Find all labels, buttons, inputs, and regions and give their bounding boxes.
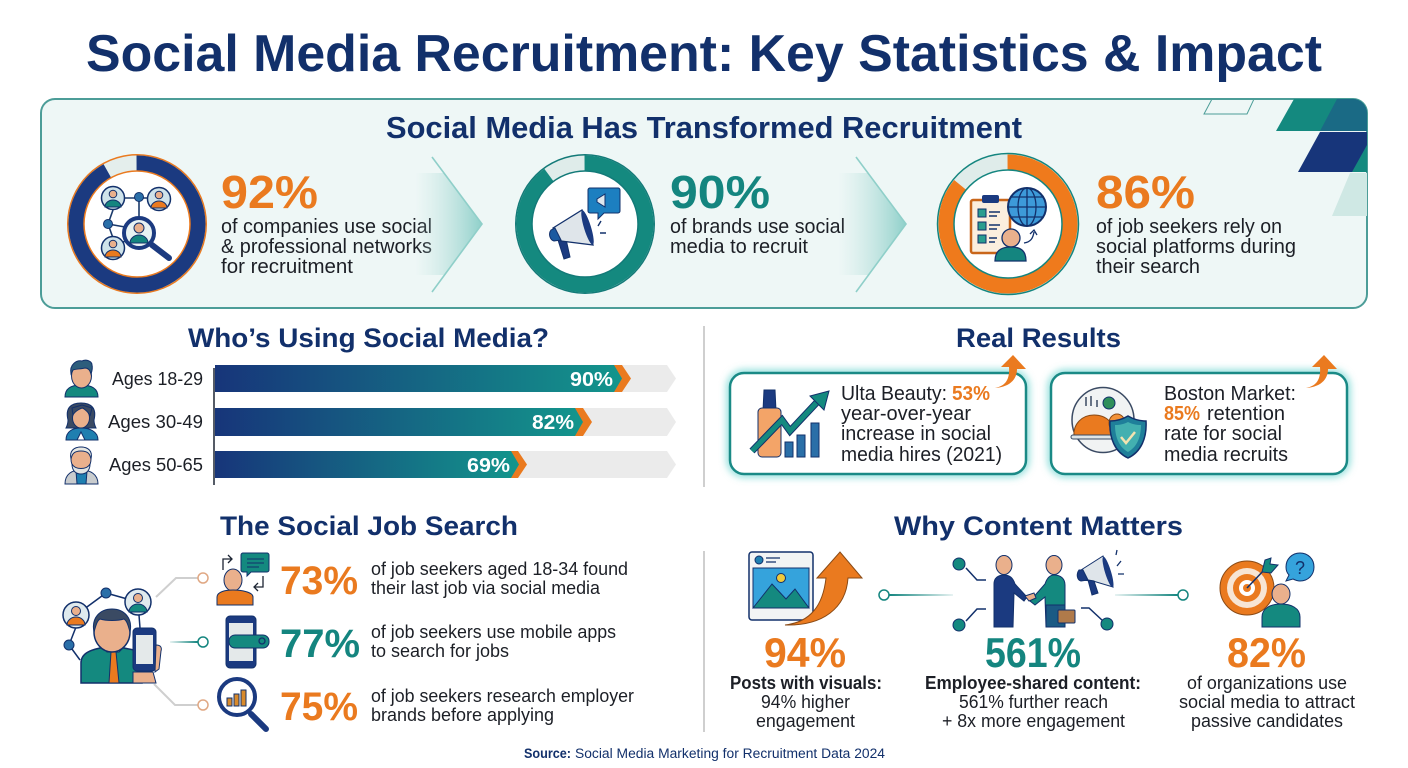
stat: 82% organizations: passive candidates [1191,711,1343,731]
donut: 86% [938,154,1078,294]
row: ages 30-49 [108,408,676,436]
icon: target and candidate: ? [1295,558,1305,578]
stat: 75%: 75% [280,685,358,729]
section: the social job search [63,511,634,729]
stat: 561% employee-shared content [925,629,1141,731]
stat: 90%: of brands use social [670,216,845,238]
avatar: ages 50-65 [65,447,98,484]
stat: 86%: of job seekers rely on [1096,216,1282,238]
stat: 94% posts with visuals: 94% [764,629,846,676]
stat: 92%: for recruitment [221,256,353,278]
icon: megaphone [550,188,620,259]
heading: The Social Job Search [220,511,518,541]
heading: Real Results [956,323,1121,353]
card text: Boston Market: [1164,383,1296,405]
row: ages 30-49: 82% [532,412,574,434]
stat: 90%: media to recruit [670,236,808,258]
stat: 86%: social platforms during [1096,236,1296,258]
stat: 561% employee-shared content: + 8x more engagement [942,711,1125,731]
connector: top [156,573,208,597]
donut: 92% [67,154,207,294]
row: ages 18-29: 90% [570,369,613,391]
stat: 94% posts with visuals: 94% higher [761,692,850,712]
stat: 94% posts with visuals: engagement [756,711,855,731]
axis [213,368,215,485]
row: ages 18-29 [112,365,676,392]
stat: 561% employee-shared content: Employee-shared content: [925,673,1141,693]
stat: 73%: their last job via social media [371,577,601,598]
card: boston market [1051,355,1347,474]
card text: 53% [952,383,990,405]
card text: increase in social [841,423,991,445]
icon: bottle and growth chart [752,390,829,457]
arrow: chevron 1 [415,157,482,292]
source: Source: [524,746,571,761]
connector: middle [170,637,208,647]
arrow: up [995,355,1026,388]
stat: 92%: 92% [221,166,318,218]
stat: 90% [670,166,845,258]
stat: 92%: of companies use social [221,216,432,238]
row: ages 30-49: Ages 30-49 [108,412,203,432]
stat: 73% [280,558,628,603]
stat: 94% posts with visuals [730,629,882,731]
stat: 77%: 77% [280,622,360,666]
icon: post with visuals and arrow [749,552,862,625]
icon: meal and shield [1071,388,1146,458]
card text [841,383,1002,466]
row: ages 50-65: 69% [467,455,510,477]
icon: checklist and globe [971,188,1046,261]
section: real results [730,323,1347,474]
arrow: chevron 2 [838,157,906,292]
card text: year-over-year [841,403,971,425]
source: Social Media Marketing for Recruitment Data 2024 [575,746,885,761]
stat: 86%: 86% [1096,166,1195,218]
stat: 77%: of job seekers use mobile apps [371,621,616,642]
stat: 75%: brands before applying [371,704,554,725]
avatar: ages 18-29 [65,360,98,397]
icon: mobile search [226,616,269,668]
icon: person with chat [217,553,269,605]
panel: social media has transformed recruitment [41,99,1367,308]
card text: Ulta Beauty: [841,383,947,405]
connector: left [879,590,953,600]
stat: 92% [221,166,432,278]
card text: media recruits [1164,444,1288,466]
card text [1164,383,1296,466]
illustration: person with phone and network [63,588,161,683]
avatar: ages 30-49 [66,403,98,440]
stat: 90%: 90% [670,166,770,218]
stat: 86% [1096,166,1296,278]
stat: 82% organizations: 82% [1227,629,1306,676]
card text: rate for social [1164,423,1282,445]
stat: 75% [280,685,634,729]
donut: 90% [515,154,655,294]
panel heading: Social Media Has Transformed Recruitment [386,110,1022,145]
stat: 82% organizations: of organizations use [1187,673,1347,693]
stat: 77%: to search for jobs [371,640,509,661]
section: why content matters [730,511,1355,731]
stat: 92%: & professional networks [221,236,432,258]
card text: media hires (2021) [841,444,1002,466]
icon: target and candidate [1220,553,1314,627]
arrow: up [1306,355,1337,388]
section: who's using social media [65,323,676,485]
icon: handshake with megaphone [953,550,1124,631]
card text: retention [1207,403,1285,425]
stat: 86%: their search [1096,256,1200,278]
stat: 561% employee-shared content: 561% [985,629,1081,676]
stat: 77% [280,621,616,666]
stat: 561% employee-shared content: 561% further reach [959,692,1108,712]
stat: 75%: of job seekers research employer [371,685,634,706]
corner decoration [1204,99,1367,216]
stat: 82% organizations: social media to attract [1179,692,1355,712]
heading: Why Content Matters [894,511,1183,541]
row: ages 50-65: Ages 50-65 [109,455,203,475]
card text: 85% [1164,403,1200,425]
icon: network search [102,186,170,260]
icon: magnifier chart [219,679,266,729]
heading: Who’s Using Social Media? [188,323,549,353]
row: ages 50-65 [109,451,676,478]
card: ulta beauty [730,355,1026,474]
stat: 82% organizations [1179,629,1355,731]
connector: right [1115,590,1188,600]
connector: bottom [154,684,208,710]
stat: 73%: of job seekers aged 18-34 found [371,558,628,579]
stat: 94% posts with visuals: Posts with visuals: [730,673,882,693]
title: Social Media Recruitment: Key Statistics & Impact [86,25,1322,83]
stat: 73%: 73% [280,559,358,603]
row: ages 18-29: Ages 18-29 [112,369,203,389]
